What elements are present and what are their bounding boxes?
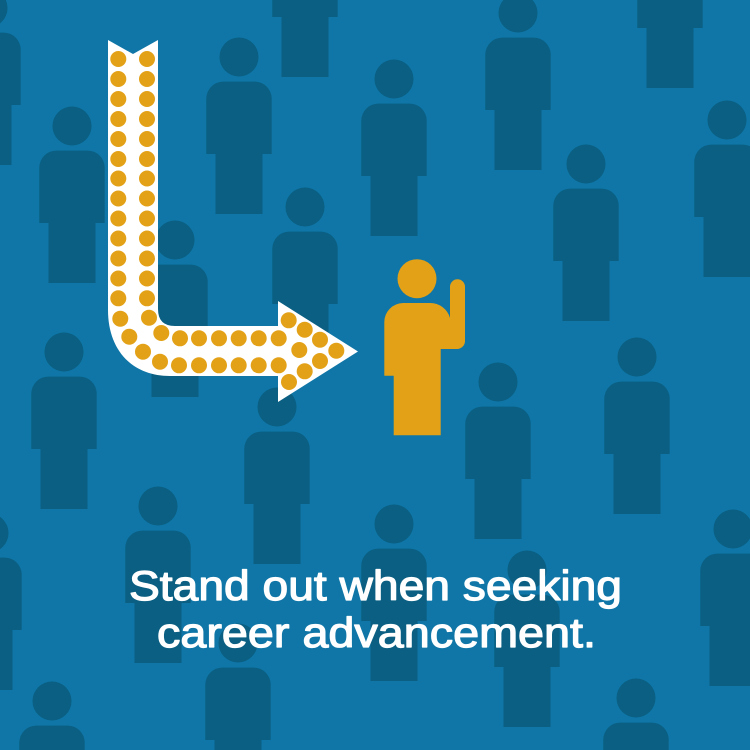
person silhouette (0, 514, 22, 690)
person silhouette (361, 60, 427, 236)
person silhouette (637, 0, 703, 88)
person silhouette (553, 144, 619, 321)
marquee arrow pointing at the raised-hand person (108, 40, 358, 402)
caption line 1: Stand out when seeking (129, 562, 622, 609)
person silhouette (485, 0, 551, 170)
person silhouette (142, 220, 208, 397)
person silhouette (244, 388, 310, 564)
caption line 2: career advancement. (157, 609, 596, 656)
person silhouette (272, 0, 338, 77)
person silhouette, cut off by bottom edge (603, 678, 669, 750)
person silhouette (125, 486, 191, 663)
icon: gold person raising hand (384, 259, 465, 435)
person silhouette (604, 338, 670, 514)
person silhouette (272, 188, 338, 364)
person silhouette (31, 332, 97, 509)
person silhouette, cut off by bottom edge (205, 624, 271, 750)
person silhouette (361, 504, 427, 681)
person silhouette (494, 550, 560, 727)
person silhouette (0, 0, 21, 165)
person silhouette (206, 38, 272, 214)
person silhouette (700, 510, 750, 686)
arrow light dots (110, 51, 344, 390)
caption text (129, 562, 622, 656)
person silhouette, cut off by bottom edge (19, 682, 85, 750)
person silhouette (465, 362, 531, 539)
arrow body (108, 40, 358, 402)
person silhouette (694, 100, 750, 277)
person silhouette (39, 106, 105, 283)
